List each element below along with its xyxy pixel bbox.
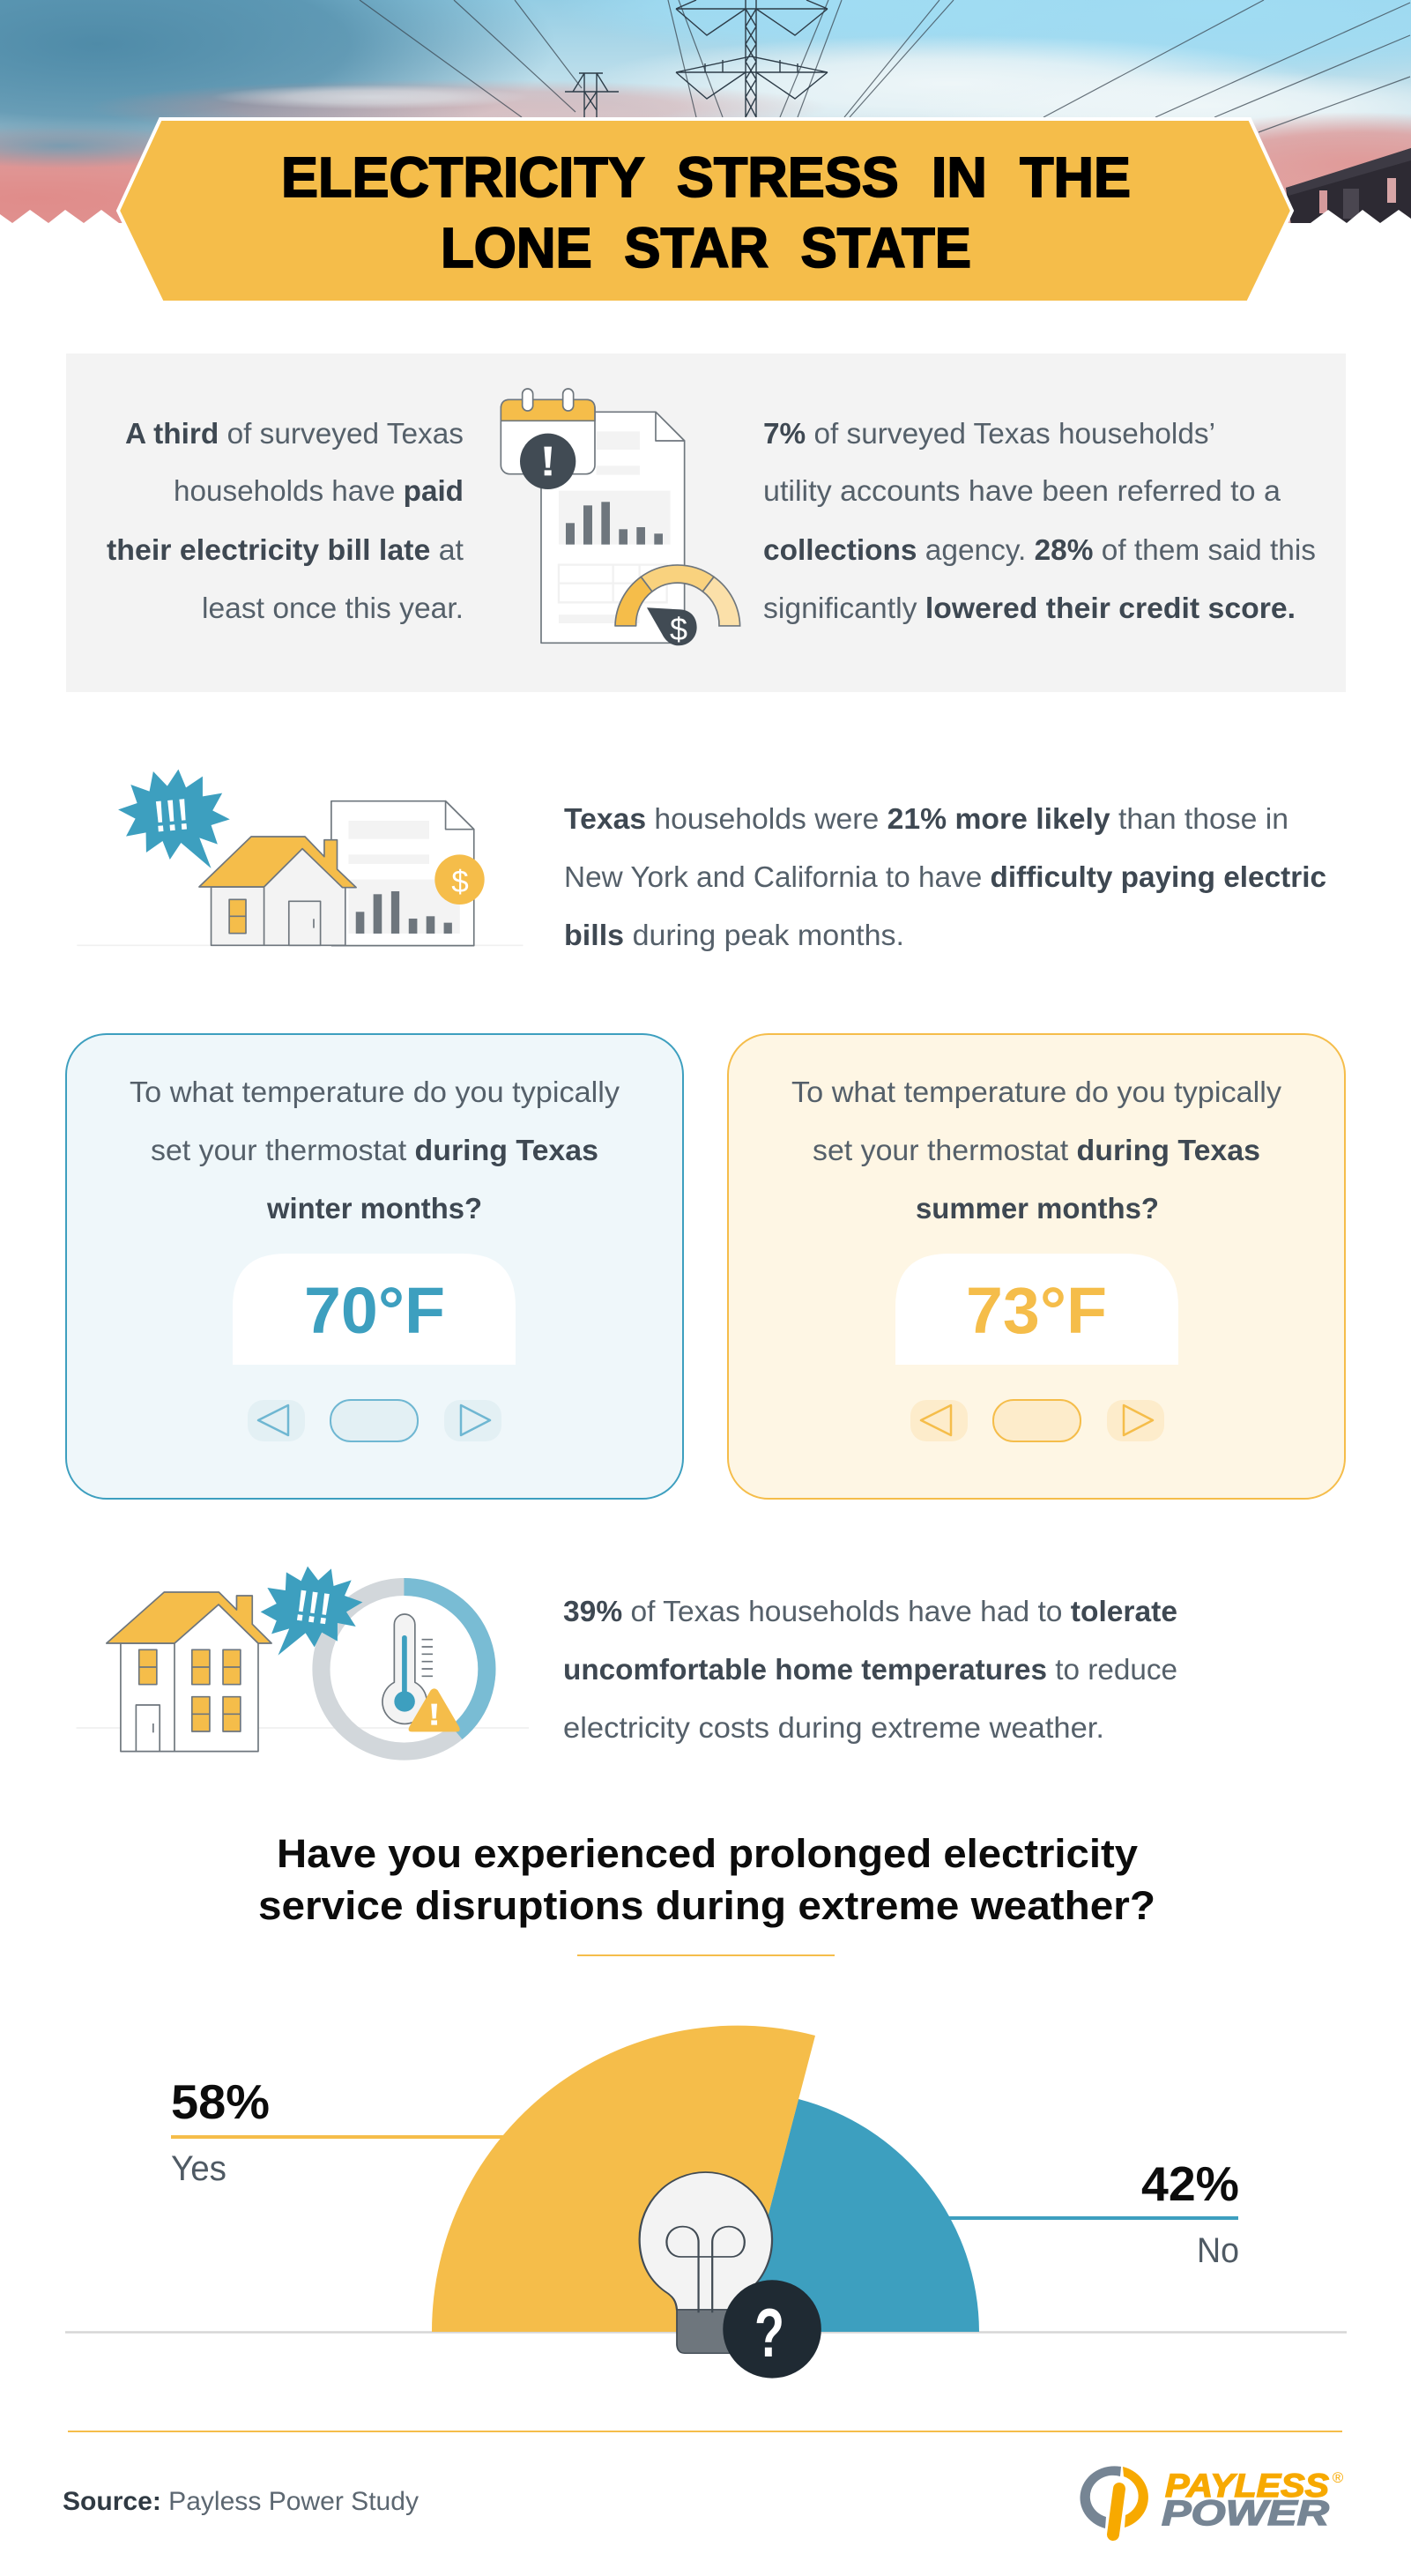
- icon: light bulb: [640, 2172, 821, 2379]
- leader: yes: [171, 2135, 511, 2139]
- text: 21 percent more likely: bills during peak months.: [564, 919, 904, 951]
- question heading: [258, 1831, 1155, 1928]
- panel: winter thermostat: [66, 1034, 683, 1499]
- label: no: No: [1197, 2231, 1239, 2270]
- label: no: [1141, 2156, 1239, 2270]
- logo: Payless Power: ®: [1333, 2469, 1344, 2486]
- text: summer question: [791, 1076, 1282, 1225]
- section: uncomfortable temperatures: [77, 1567, 1177, 1752]
- text: a third paid late: households have paid: [174, 474, 464, 507]
- thermostat buttons: [910, 1400, 1164, 1441]
- logo: Payless Power: PAYLESS: [1165, 2468, 1329, 2504]
- text: collections: [763, 417, 1316, 624]
- text: collections: utility accounts have been referred to a: [763, 474, 1281, 507]
- title: ELECTRICITY STRESS IN THE: [281, 145, 1131, 209]
- text: 21 percent more likely: [564, 802, 1326, 951]
- text: summer question: set your thermostat during Texas: [813, 1134, 1260, 1166]
- text: 21 percent more likely: Texas households were 21% more likely than those in: [564, 802, 1288, 835]
- text: collections: significantly lowered their credit score.: [763, 592, 1296, 624]
- text: a third paid late: [107, 417, 464, 624]
- coin dollar: $: [451, 865, 469, 899]
- thermostat display: [233, 1254, 516, 1365]
- title: LONE STAR STATE: [441, 216, 971, 279]
- source: Source: Payless Power Study: [63, 2487, 419, 2516]
- label: yes: Yes: [171, 2149, 227, 2188]
- panel: summer thermostat: [728, 1034, 1345, 1499]
- question heading: service disruptions during extreme weather?: [258, 1883, 1155, 1928]
- temperature value: 70°F: [304, 1274, 445, 1347]
- title banner: [118, 119, 1292, 302]
- burst label: !!!: [293, 1581, 334, 1634]
- text: winter question: winter months?: [266, 1192, 482, 1225]
- panel: late bills and collections: [66, 354, 1346, 692]
- logo: Payless Power: POWER: [1162, 2494, 1329, 2533]
- label: yes: [171, 2074, 270, 2188]
- title: [281, 145, 1131, 279]
- text: a third paid late: least once this year.: [202, 592, 464, 624]
- thermostat buttons: [248, 1400, 501, 1441]
- icon: house and bill with burst: [77, 770, 523, 946]
- text: a third paid late: their electricity bill late at: [107, 533, 464, 566]
- leader: no: [934, 2216, 1238, 2220]
- houses on the right of the photo: [1286, 148, 1411, 226]
- logo: Payless Power: [1080, 2466, 1344, 2535]
- text: summer question: To what temperature do you typically: [791, 1076, 1282, 1108]
- header photo: sky and power lines: [0, 0, 1411, 223]
- icon: bill with calendar and gauge: [501, 389, 740, 645]
- burst label: !!!: [152, 789, 191, 842]
- icon glyph: question mark: ?: [754, 2294, 784, 2371]
- torn paper edge: [0, 210, 1411, 241]
- section: house with bill: [77, 770, 1326, 951]
- temperature value: 73°F: [966, 1274, 1107, 1347]
- text: winter question: [130, 1076, 620, 1225]
- text: collections: 7% of surveyed Texas households’: [763, 417, 1215, 450]
- text: winter question: To what temperature do you typically: [130, 1076, 620, 1108]
- icon: house and thermometer: [77, 1567, 529, 1752]
- text: winter question: set your thermostat during Texas: [151, 1134, 598, 1166]
- text: tolerate temperatures: [563, 1595, 1177, 1744]
- text: 21 percent more likely: New York and California to have difficulty paying electric: [564, 860, 1326, 893]
- label: no: 42%: [1141, 2156, 1239, 2211]
- text: summer question: summer months?: [916, 1192, 1159, 1225]
- chart: outage semicircle: [65, 2026, 1347, 2379]
- segment: yes 58 percent: [432, 2026, 815, 2332]
- icon glyph: dollar: $: [670, 611, 687, 647]
- segment: no 42 percent: [738, 2099, 979, 2332]
- text: tolerate temperatures: electricity costs during extreme weather.: [563, 1711, 1104, 1744]
- thermostat display: [895, 1254, 1178, 1365]
- text: tolerate temperatures: 39% of Texas households have had to tolerate: [563, 1595, 1177, 1627]
- text: collections: collections agency. 28% of them said this: [763, 533, 1316, 566]
- text: tolerate temperatures: uncomfortable home temperatures to reduce: [563, 1653, 1177, 1686]
- text: a third paid late: A third of surveyed Texas: [125, 417, 464, 450]
- label: yes: 58%: [171, 2074, 270, 2129]
- question heading: Have you experienced prolonged electricity: [277, 1831, 1138, 1876]
